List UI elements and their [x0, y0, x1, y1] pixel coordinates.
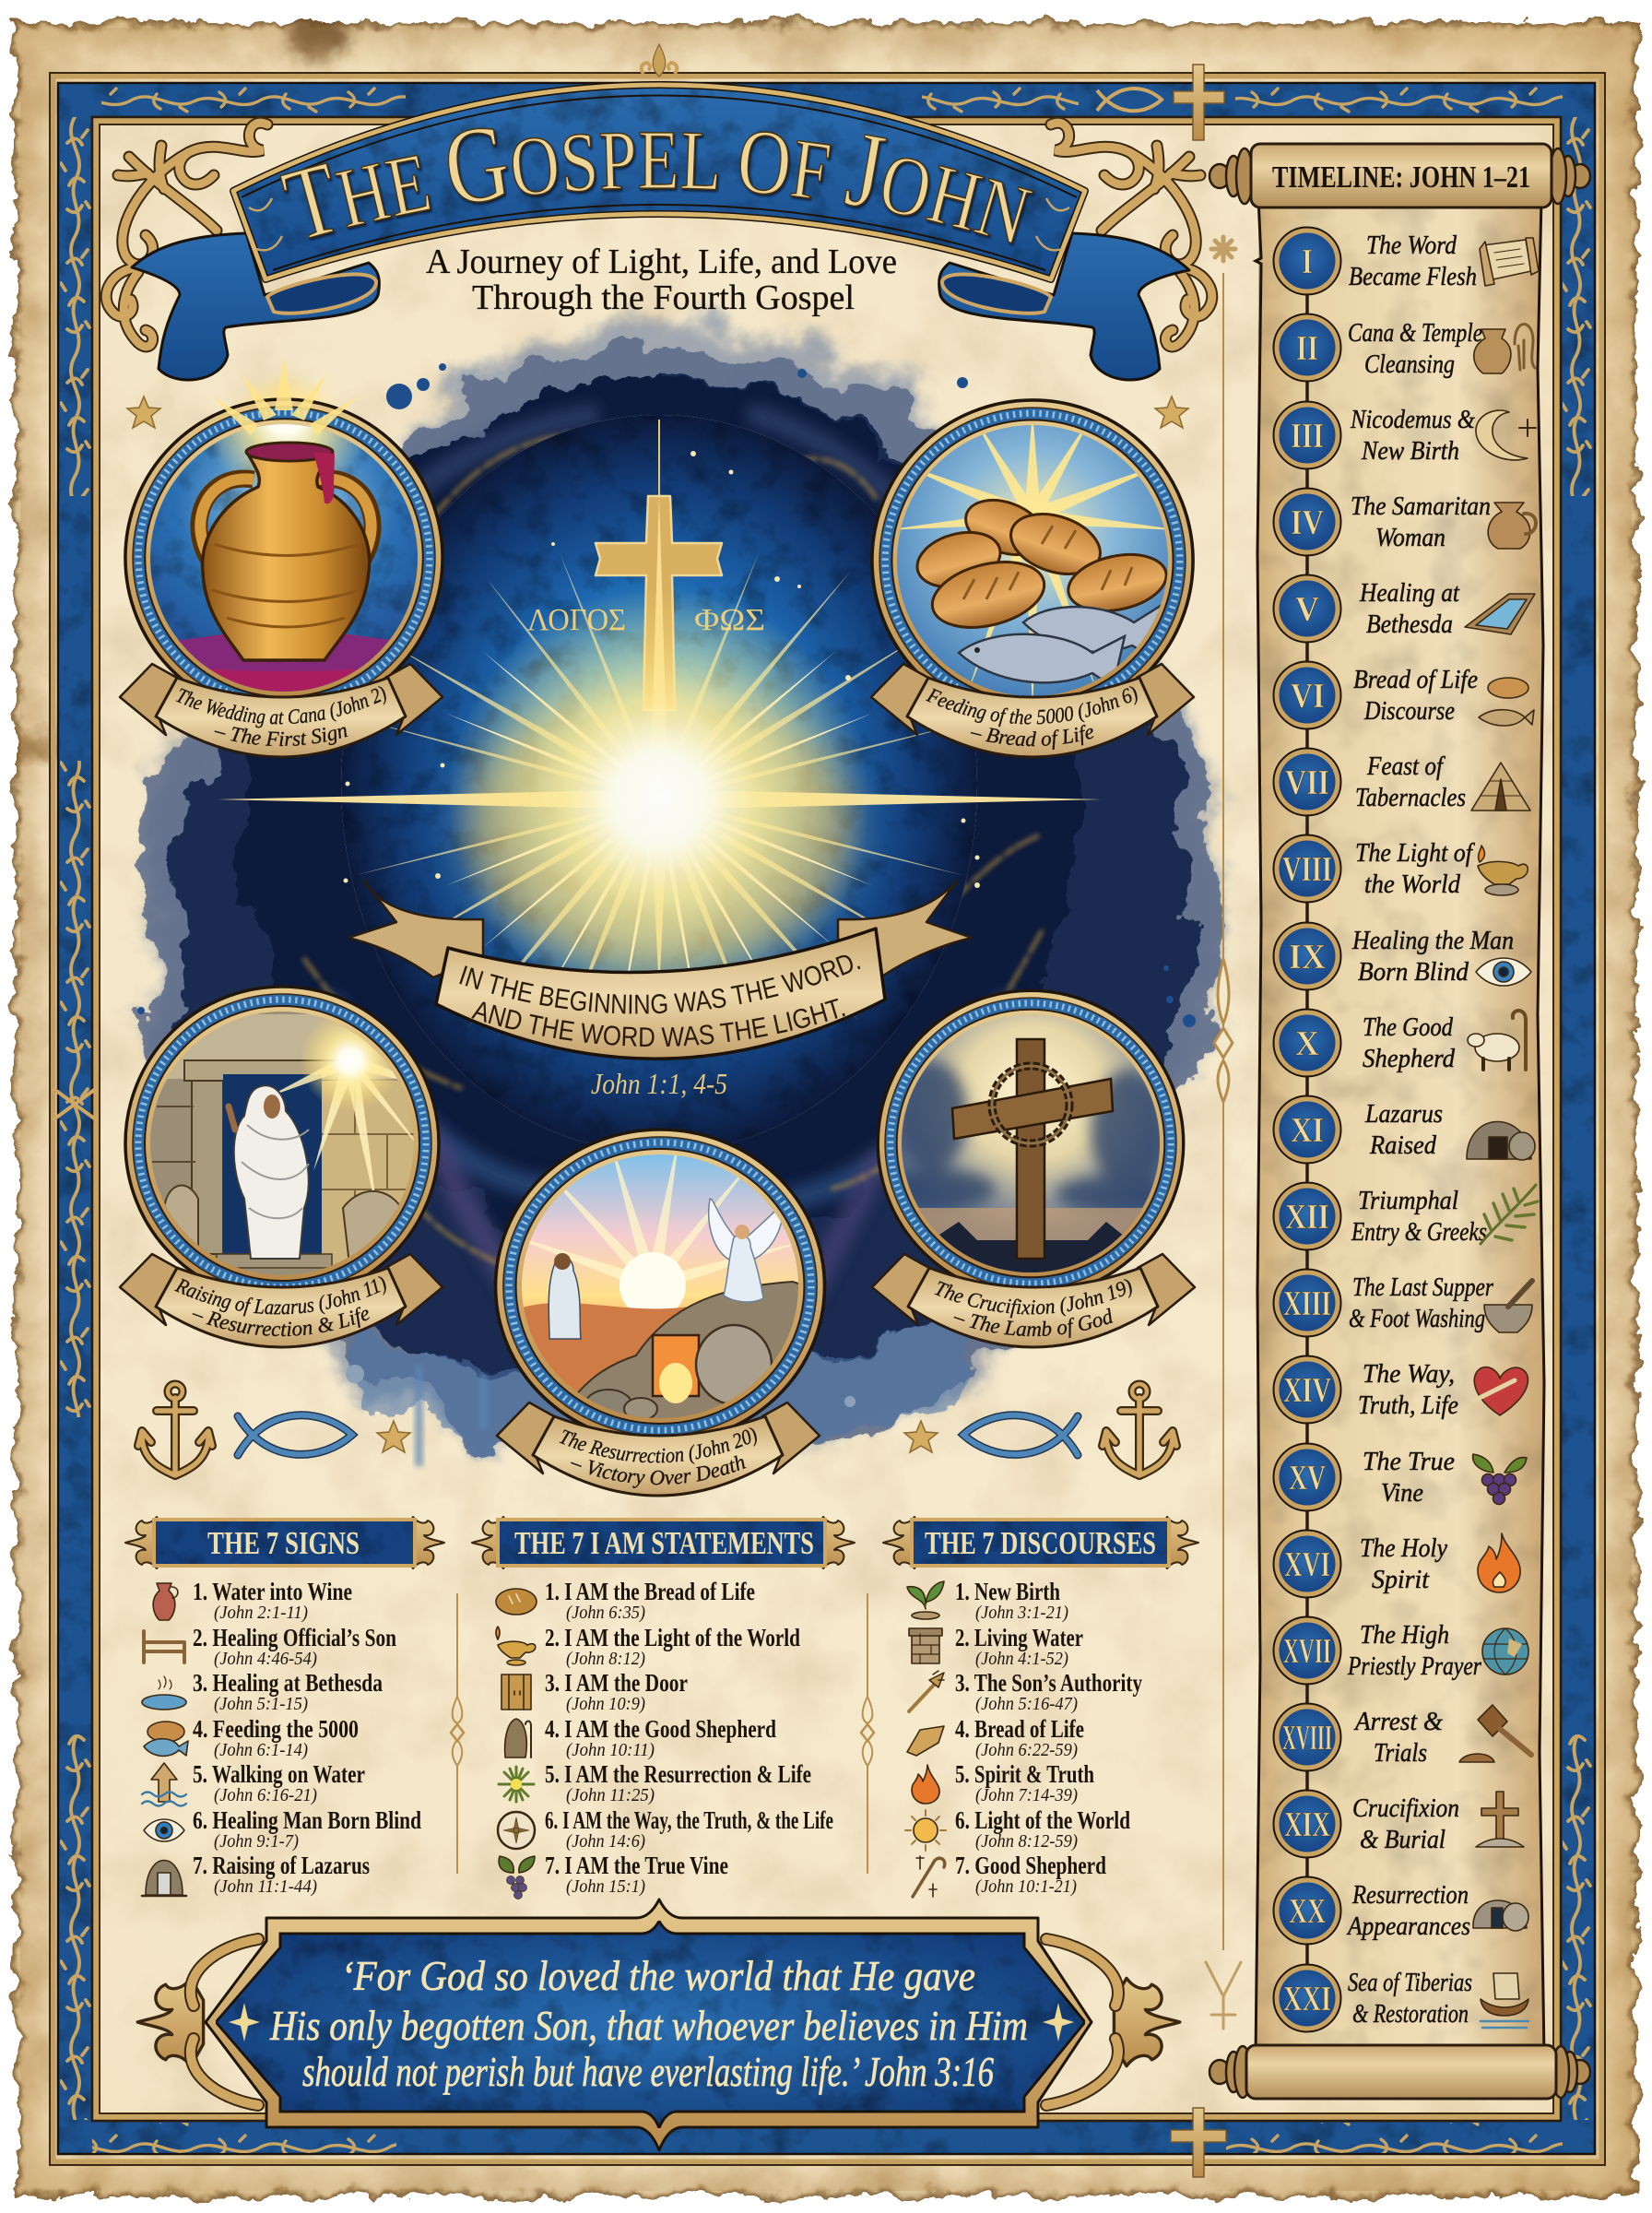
timeline entries: Priestly Prayer [1347, 1651, 1482, 1681]
timeline entries: Feast of [1366, 751, 1446, 781]
list: the 7 discourses: 5. Spirit & Truth [955, 1760, 1094, 1788]
divider between lists [861, 1593, 874, 1874]
list: the 7 I AM statements [545, 1578, 833, 1897]
scroll top roller [1210, 144, 1590, 207]
timeline entries: Became Flesh [1349, 262, 1477, 291]
timeline numerals: XIII [1283, 1284, 1331, 1323]
timeline numerals: II [1296, 329, 1318, 368]
warm glow around the burst [466, 692, 853, 968]
list: the 7 I AM statements: 7. I AM the True Vine [545, 1852, 728, 1879]
timeline numerals: X [1295, 1024, 1319, 1063]
timeline numerals [1274, 227, 1340, 2032]
bottom verse plaque [137, 1899, 1180, 2150]
list: the 7 I AM statements: (John 15:1) [566, 1876, 645, 1897]
list: the 7 signs: (John 4:46-54) [214, 1649, 317, 1669]
vertical divider with ornaments [1206, 237, 1241, 2029]
timeline entries [1346, 231, 1514, 2029]
subtitle [426, 243, 897, 317]
list: the 7 signs: 3. Healing at Bethesda [193, 1669, 383, 1697]
section header: the 7 signs: THE 7 SIGNS [207, 1525, 360, 1561]
medallion: wedding at Cana [124, 358, 444, 695]
list: the 7 discourses: (John 7:14-39) [975, 1785, 1078, 1805]
glowing gold cross [596, 420, 722, 710]
timeline numerals: VIII [1282, 850, 1332, 889]
plaque gold frame [206, 1899, 1092, 2150]
section header: the 7 discourses [883, 1517, 1198, 1568]
list: the 7 I AM statements: 4. I AM the Good Shepherd [545, 1715, 776, 1743]
timeline connector [1305, 261, 1309, 1998]
timeline numerals: V [1295, 590, 1320, 629]
list: the 7 signs: 6. Healing Man Born Blind [193, 1806, 421, 1834]
gold streaks in the dark sky [304, 433, 1042, 1263]
list: the 7 I AM statements: (John 6:35) [566, 1603, 645, 1623]
timeline entries: The Word [1366, 231, 1457, 260]
pale wash under medallions [350, 1309, 977, 1448]
list: the 7 I AM statements: 3. I AM the Door [545, 1669, 688, 1697]
icon: left anchor [138, 1384, 212, 1475]
timeline entries: Crucifixion [1352, 1793, 1459, 1823]
list: the 7 signs: (John 5:1-15) [214, 1694, 308, 1714]
timeline numerals: VII [1285, 763, 1329, 802]
ribbon: resurrection caption: The Resurrection (John 20) [556, 1423, 761, 1467]
verse reference: John 1:1, 4-5 [591, 1067, 727, 1100]
timeline entries: Healing the Man [1351, 926, 1514, 955]
ribbon: feeding of the 5000 caption [871, 664, 1194, 757]
timeline entries: Resurrection [1351, 1880, 1469, 1910]
list: the 7 I AM statements: 5. I AM the Resurrection & Life [545, 1760, 811, 1788]
stars around the light [343, 451, 980, 888]
timeline entries: The High [1360, 1620, 1449, 1650]
timeline numerals: XII [1285, 1198, 1329, 1237]
section header: the 7 I AM statements: THE 7 I AM STATEMENTS [514, 1525, 814, 1561]
icon: right star [904, 1421, 938, 1452]
title flourish right [1051, 123, 1212, 347]
timeline entries: Spirit [1372, 1565, 1430, 1594]
section header: the 7 I AM statements [472, 1517, 855, 1568]
timeline numerals: XVIII [1282, 1719, 1332, 1757]
scroll bottom roller [1210, 2045, 1590, 2099]
timeline entries: Cana & Temple [1348, 318, 1482, 348]
timeline entries: Cleansing [1364, 349, 1455, 379]
verse text: should not perish but have everlasting life.’ John 3:16 [302, 2048, 994, 2095]
list: the 7 discourses: 2. Living Water [955, 1624, 1083, 1651]
list: the 7 discourses: 3. The Son’s Authority [955, 1669, 1142, 1697]
ribbon: in the beginning: AND THE WORD WAS THE LIGHT. [469, 992, 849, 1053]
ribbon: crucifixion caption: The Crucifixion (John 19) [931, 1274, 1136, 1319]
subtitle: A Journey of Light, Life, and Love [426, 243, 897, 281]
icon: left fish [238, 1415, 352, 1455]
title banner [132, 85, 1189, 380]
timeline entries: & Restoration [1352, 1999, 1469, 2029]
title banner: THE GOSPEL OF JOHN [273, 101, 1040, 264]
timeline numerals: IV [1291, 503, 1324, 542]
central watercolor blob [143, 341, 1216, 1448]
list: the 7 signs: (John 9:1-7) [214, 1831, 299, 1852]
list: the 7 I AM statements: (John 10:9) [566, 1694, 645, 1714]
list: the 7 discourses: (John 5:16-47) [975, 1694, 1078, 1714]
timeline entries: & Burial [1360, 1825, 1446, 1854]
list: the 7 discourses: (John 10:1-21) [975, 1876, 1077, 1897]
list: the 7 signs: (John 6:1-14) [214, 1740, 308, 1760]
section header: the 7 discourses: THE 7 DISCOURSES [925, 1525, 1156, 1561]
timeline entries: The Samaritan [1351, 491, 1491, 521]
subtitle: Through the Fourth Gospel [472, 278, 855, 317]
icon: top border fish and cross [1097, 65, 1224, 140]
list: the 7 signs: 1. Water into Wine [193, 1578, 352, 1605]
medallion: the resurrection [496, 1129, 824, 1443]
timeline numerals: XVI [1284, 1545, 1330, 1584]
icon: right fish [963, 1415, 1078, 1455]
greek word phos: ΦΩΣ [694, 603, 765, 637]
greek word logos: ΛΟΓΟΣ [527, 603, 626, 637]
list: the 7 I AM statements: 1. I AM the Bread of Life [545, 1578, 755, 1605]
icons: the I AM statements [496, 1589, 537, 1899]
timeline entries: The Holy [1360, 1533, 1447, 1563]
timeline icons [1459, 238, 1539, 2028]
timeline numerals: XV [1289, 1459, 1326, 1497]
list: the 7 I AM statements: 2. I AM the Light of the World [545, 1624, 800, 1651]
timeline entries: Born Blind [1358, 957, 1469, 987]
timeline numerals: XIV [1283, 1371, 1331, 1410]
ribbon: wedding at Cana caption: – The First Sign [214, 727, 348, 747]
icons: the 7 discourses [905, 1581, 946, 1897]
timeline numerals: I [1302, 243, 1313, 281]
timeline entries: Sea of Tiberias [1348, 1968, 1472, 1997]
ribbon: resurrection caption: – Victory Over Death [567, 1450, 749, 1489]
timeline entries: Woman [1375, 523, 1446, 552]
list: the 7 signs: 5. Walking on Water [193, 1760, 365, 1788]
timeline entries: The Way, [1363, 1359, 1455, 1389]
timeline entries: Bethesda [1366, 609, 1453, 639]
list: the 7 I AM statements: 6. I AM the Way, the Truth, & the Life [545, 1806, 833, 1834]
list: the 7 I AM statements: (John 10:11) [566, 1740, 655, 1760]
timeline entries: Arrest & [1353, 1707, 1443, 1736]
list: the 7 discourses: (John 8:12-59) [975, 1831, 1078, 1852]
timeline entries: Bread of Life [1353, 665, 1478, 694]
timeline entries: Discourse [1363, 696, 1455, 726]
timeline entries: The Good [1363, 1012, 1453, 1042]
swirling bands in the dark sky [332, 415, 1005, 1291]
timeline entries: & Foot Washing [1349, 1304, 1485, 1333]
plaque side flourishes [137, 1939, 1180, 2105]
ribbon: Lazarus caption: – Resurrection & Life [189, 1301, 373, 1341]
timeline numerals: III [1291, 417, 1324, 456]
list: the 7 discourses: (John 3:1-21) [975, 1603, 1068, 1623]
timeline entries: Nicodemus & [1350, 405, 1475, 434]
list: the 7 signs: (John 2:1-11) [214, 1603, 308, 1623]
list: the 7 discourses: 1. New Birth [955, 1578, 1060, 1605]
decorative stars top [127, 396, 1188, 428]
verse text [269, 1952, 1028, 2095]
list: the 7 signs: (John 6:16-21) [214, 1785, 317, 1805]
timeline entries: Tabernacles [1355, 783, 1466, 812]
list: the 7 signs: 7. Raising of Lazarus [193, 1852, 370, 1879]
list: the 7 signs: 4. Feeding the 5000 [193, 1715, 359, 1743]
icons: the 7 signs [142, 1583, 188, 1896]
soft grey wash behind the sky [148, 318, 1218, 1448]
list: the 7 discourses: 7. Good Shepherd [955, 1852, 1106, 1879]
timeline entries: The True [1363, 1447, 1455, 1476]
list: the 7 discourses: (John 4:1-52) [975, 1649, 1068, 1669]
ribbon: crucifixion caption: – The Lamb of God [950, 1304, 1116, 1341]
list: the 7 signs: 2. Healing Official’s Son [193, 1624, 396, 1651]
timeline numerals: XX [1289, 1892, 1326, 1931]
ribbon: Lazarus caption: Raising of Lazarus (John 11) [171, 1272, 390, 1319]
list: the 7 signs [193, 1578, 421, 1897]
ribbon: in the beginning: IN THE BEGINNING WAS THE WORD. [455, 945, 865, 1021]
icon: top centre ornament [642, 44, 677, 77]
list: the 7 I AM statements: (John 8:12) [566, 1649, 645, 1669]
ribbon: wedding at Cana caption: The Wedding at Cana (John 2) [175, 686, 386, 728]
list: the 7 discourses: (John 6:22-59) [975, 1740, 1078, 1760]
timeline entries: Triumphal [1358, 1186, 1458, 1215]
icon: left star [377, 1421, 410, 1452]
icon: bottom border cross [1171, 2108, 1226, 2177]
timeline entries: Trials [1374, 1738, 1427, 1768]
ribbon: resurrection caption [497, 1402, 820, 1496]
verse text: His only begotten Son, that whoever believes in Him [269, 2002, 1028, 2049]
timeline entries: The Last Supper [1352, 1272, 1494, 1302]
timeline entries: New Birth [1361, 436, 1459, 466]
timeline entries: Appearances [1346, 1911, 1470, 1941]
divider between lists [451, 1593, 464, 1874]
medallion: raising of Lazarus [125, 987, 439, 1300]
starburst of light [217, 495, 1102, 1048]
timeline numerals: XIX [1284, 1805, 1330, 1844]
section header: the 7 signs [125, 1517, 444, 1568]
scroll body outline [1256, 198, 1544, 2056]
timeline entries: Lazarus [1364, 1099, 1443, 1129]
ribbon: wedding at Cana caption [120, 664, 442, 757]
timeline entries: Vine [1381, 1478, 1423, 1508]
medallion: the crucifixion [878, 990, 1184, 1296]
scroll body [1256, 198, 1544, 2056]
plaque sparkles [229, 2003, 1074, 2041]
medallion: feeding of the 5000 [872, 400, 1193, 721]
timeline entries: The Light of [1355, 838, 1476, 868]
ribbon: feeding of the 5000 caption: – Bread of Life [968, 719, 1096, 751]
timeline heading: TIMELINE: JOHN 1–21 [1272, 160, 1530, 195]
timeline numerals: XVII [1283, 1632, 1331, 1671]
verse text: ‘For God so loved the world that He gave [341, 1952, 975, 1999]
ribbon: in the beginning [348, 880, 972, 1059]
timeline entries: Truth, Life [1358, 1391, 1458, 1420]
list: the 7 discourses: 4. Bread of Life [955, 1715, 1084, 1743]
blue light disc [341, 415, 977, 1153]
timeline entries: the World [1364, 870, 1460, 899]
title flourish left [106, 123, 267, 347]
timeline entries: Shepherd [1363, 1044, 1455, 1073]
timeline numerals: XI [1291, 1111, 1324, 1150]
list: the 7 signs: (John 11:1-44) [214, 1876, 317, 1897]
timeline numerals: IX [1289, 938, 1326, 976]
icon: right anchor [1103, 1384, 1176, 1475]
list: the 7 I AM statements: (John 11:25) [566, 1785, 655, 1805]
list: the 7 discourses [955, 1578, 1142, 1897]
paint drips and splatter [137, 363, 1196, 1466]
timeline numerals: XXI [1283, 1980, 1331, 2018]
list: the 7 I AM statements: (John 14:6) [566, 1831, 645, 1852]
list: the 7 discourses: 6. Light of the World [955, 1806, 1130, 1834]
timeline entries: Healing at [1359, 578, 1460, 608]
timeline numerals: VI [1291, 677, 1325, 716]
ribbon: crucifixion caption [872, 1254, 1195, 1347]
ribbon: Lazarus caption [120, 1254, 442, 1347]
timeline entries: Entry & Greeks [1351, 1217, 1487, 1247]
timeline scroll [1210, 144, 1590, 2099]
timeline entries: Raised [1369, 1130, 1436, 1160]
ribbon: feeding of the 5000 caption: Feeding of the 5000 (John 6) [926, 686, 1138, 727]
plaque blue field [216, 1921, 1085, 2128]
